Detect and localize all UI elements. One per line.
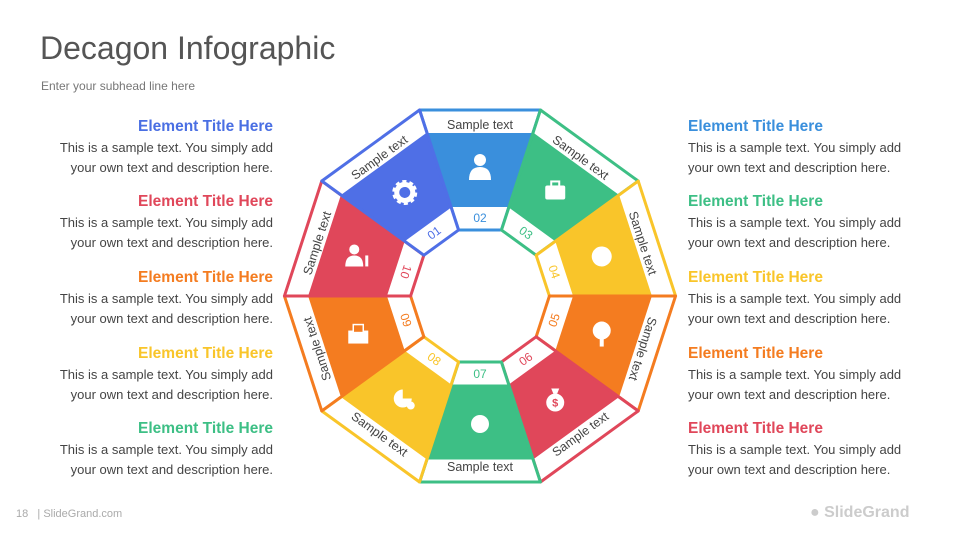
right text block 5: Element Title Here bbox=[688, 420, 823, 437]
right text block 5 bbox=[688, 420, 901, 477]
left text block 3: Element Title Here bbox=[138, 269, 273, 286]
segment 05: 05 bbox=[545, 311, 563, 329]
left text block 5: This is a sample text. You simply add your own text and description here. bbox=[60, 442, 273, 477]
segment 10: Sample text bbox=[301, 209, 334, 277]
segment 06 bbox=[470, 314, 638, 482]
left text block 2: Element Title Here bbox=[138, 193, 273, 210]
left text block 2: This is a sample text. You simply add your own text and description here. bbox=[60, 215, 273, 250]
right text block 1 bbox=[688, 118, 901, 175]
right text block 3: This is a sample text. You simply add your own text and description here. bbox=[688, 291, 901, 326]
segment 05: Sample text bbox=[626, 315, 659, 383]
left text block 4: This is a sample text. You simply add your own text and description here. bbox=[60, 367, 273, 402]
segment 03: Sample text bbox=[550, 133, 612, 183]
left text block 1: This is a sample text. You simply add your own text and description here. bbox=[60, 140, 273, 175]
segment 01: Sample text bbox=[349, 132, 411, 183]
right text block 4: Element Title Here bbox=[688, 345, 823, 362]
segment 06: Sample text bbox=[550, 409, 612, 459]
segment 01 bbox=[322, 110, 490, 278]
icon: envelope bbox=[348, 325, 368, 344]
right text block 1: Element Title Here bbox=[688, 118, 823, 135]
segment 02 bbox=[420, 110, 540, 230]
left text block 5 bbox=[60, 420, 273, 477]
icon: money bag: $ bbox=[552, 398, 558, 410]
right text block 1: This is a sample text. You simply add your own text and description here. bbox=[688, 140, 901, 175]
segment 04 bbox=[524, 181, 676, 333]
segment 05 bbox=[524, 259, 676, 411]
segment 07: 07 bbox=[473, 367, 487, 381]
subhead: Enter your subhead line here bbox=[41, 79, 195, 93]
segment 01: 01 bbox=[425, 223, 444, 242]
left text block 5: Element Title Here bbox=[138, 420, 273, 437]
segment 04: 04 bbox=[545, 263, 563, 281]
right text block 4 bbox=[688, 345, 901, 402]
segment 03 bbox=[470, 110, 638, 278]
icon: money bag bbox=[546, 389, 564, 412]
icon: tree bbox=[593, 322, 611, 347]
right text block 5: This is a sample text. You simply add your own text and description here. bbox=[688, 442, 901, 477]
left text block 3 bbox=[60, 269, 273, 326]
logo: ● SlideGrand bbox=[810, 504, 909, 521]
left text block 3: This is a sample text. You simply add your own text and description here. bbox=[60, 291, 273, 326]
title: Decagon Infographic bbox=[40, 30, 335, 66]
icon: pie gears bbox=[394, 390, 415, 410]
left text block 4 bbox=[60, 345, 273, 402]
left text block 1 bbox=[60, 118, 273, 175]
segment 09: 09 bbox=[397, 312, 415, 329]
footer: 18 | SlideGrand.com bbox=[16, 508, 122, 520]
segment 09: Sample text bbox=[300, 315, 334, 382]
segment 10: 10 bbox=[397, 263, 415, 281]
icon: person chart bbox=[345, 244, 368, 266]
left text block 1: Element Title Here bbox=[138, 118, 273, 135]
segment 09 bbox=[284, 259, 436, 411]
segment 06: 06 bbox=[516, 349, 536, 369]
segment 04: Sample text bbox=[626, 210, 660, 277]
segment 03: 03 bbox=[516, 223, 536, 243]
right text block 3 bbox=[688, 269, 901, 326]
left text block 2 bbox=[60, 193, 273, 250]
segment 08 bbox=[322, 314, 490, 482]
segment 08: 08 bbox=[425, 350, 444, 369]
segment 07 bbox=[420, 362, 540, 482]
left text block 4: Element Title Here bbox=[138, 345, 273, 362]
segment 02: Sample text bbox=[447, 118, 514, 132]
right text block 2: Element Title Here bbox=[688, 193, 823, 210]
right text block 3: Element Title Here bbox=[688, 269, 823, 286]
icon: person bbox=[469, 154, 491, 180]
right text block 4: This is a sample text. You simply add your own text and description here. bbox=[688, 367, 901, 402]
segment 10 bbox=[284, 181, 436, 333]
right text block 2 bbox=[688, 193, 901, 250]
icon: gear bbox=[389, 177, 420, 208]
icon: briefcase bbox=[545, 181, 565, 199]
segment 08: Sample text bbox=[349, 409, 411, 460]
segment 02: 02 bbox=[473, 211, 487, 225]
segment 07: Sample text bbox=[447, 460, 514, 474]
right text block 2: This is a sample text. You simply add your own text and description here. bbox=[688, 215, 901, 250]
icon: head bbox=[471, 415, 489, 433]
icon: globe bbox=[589, 244, 614, 269]
